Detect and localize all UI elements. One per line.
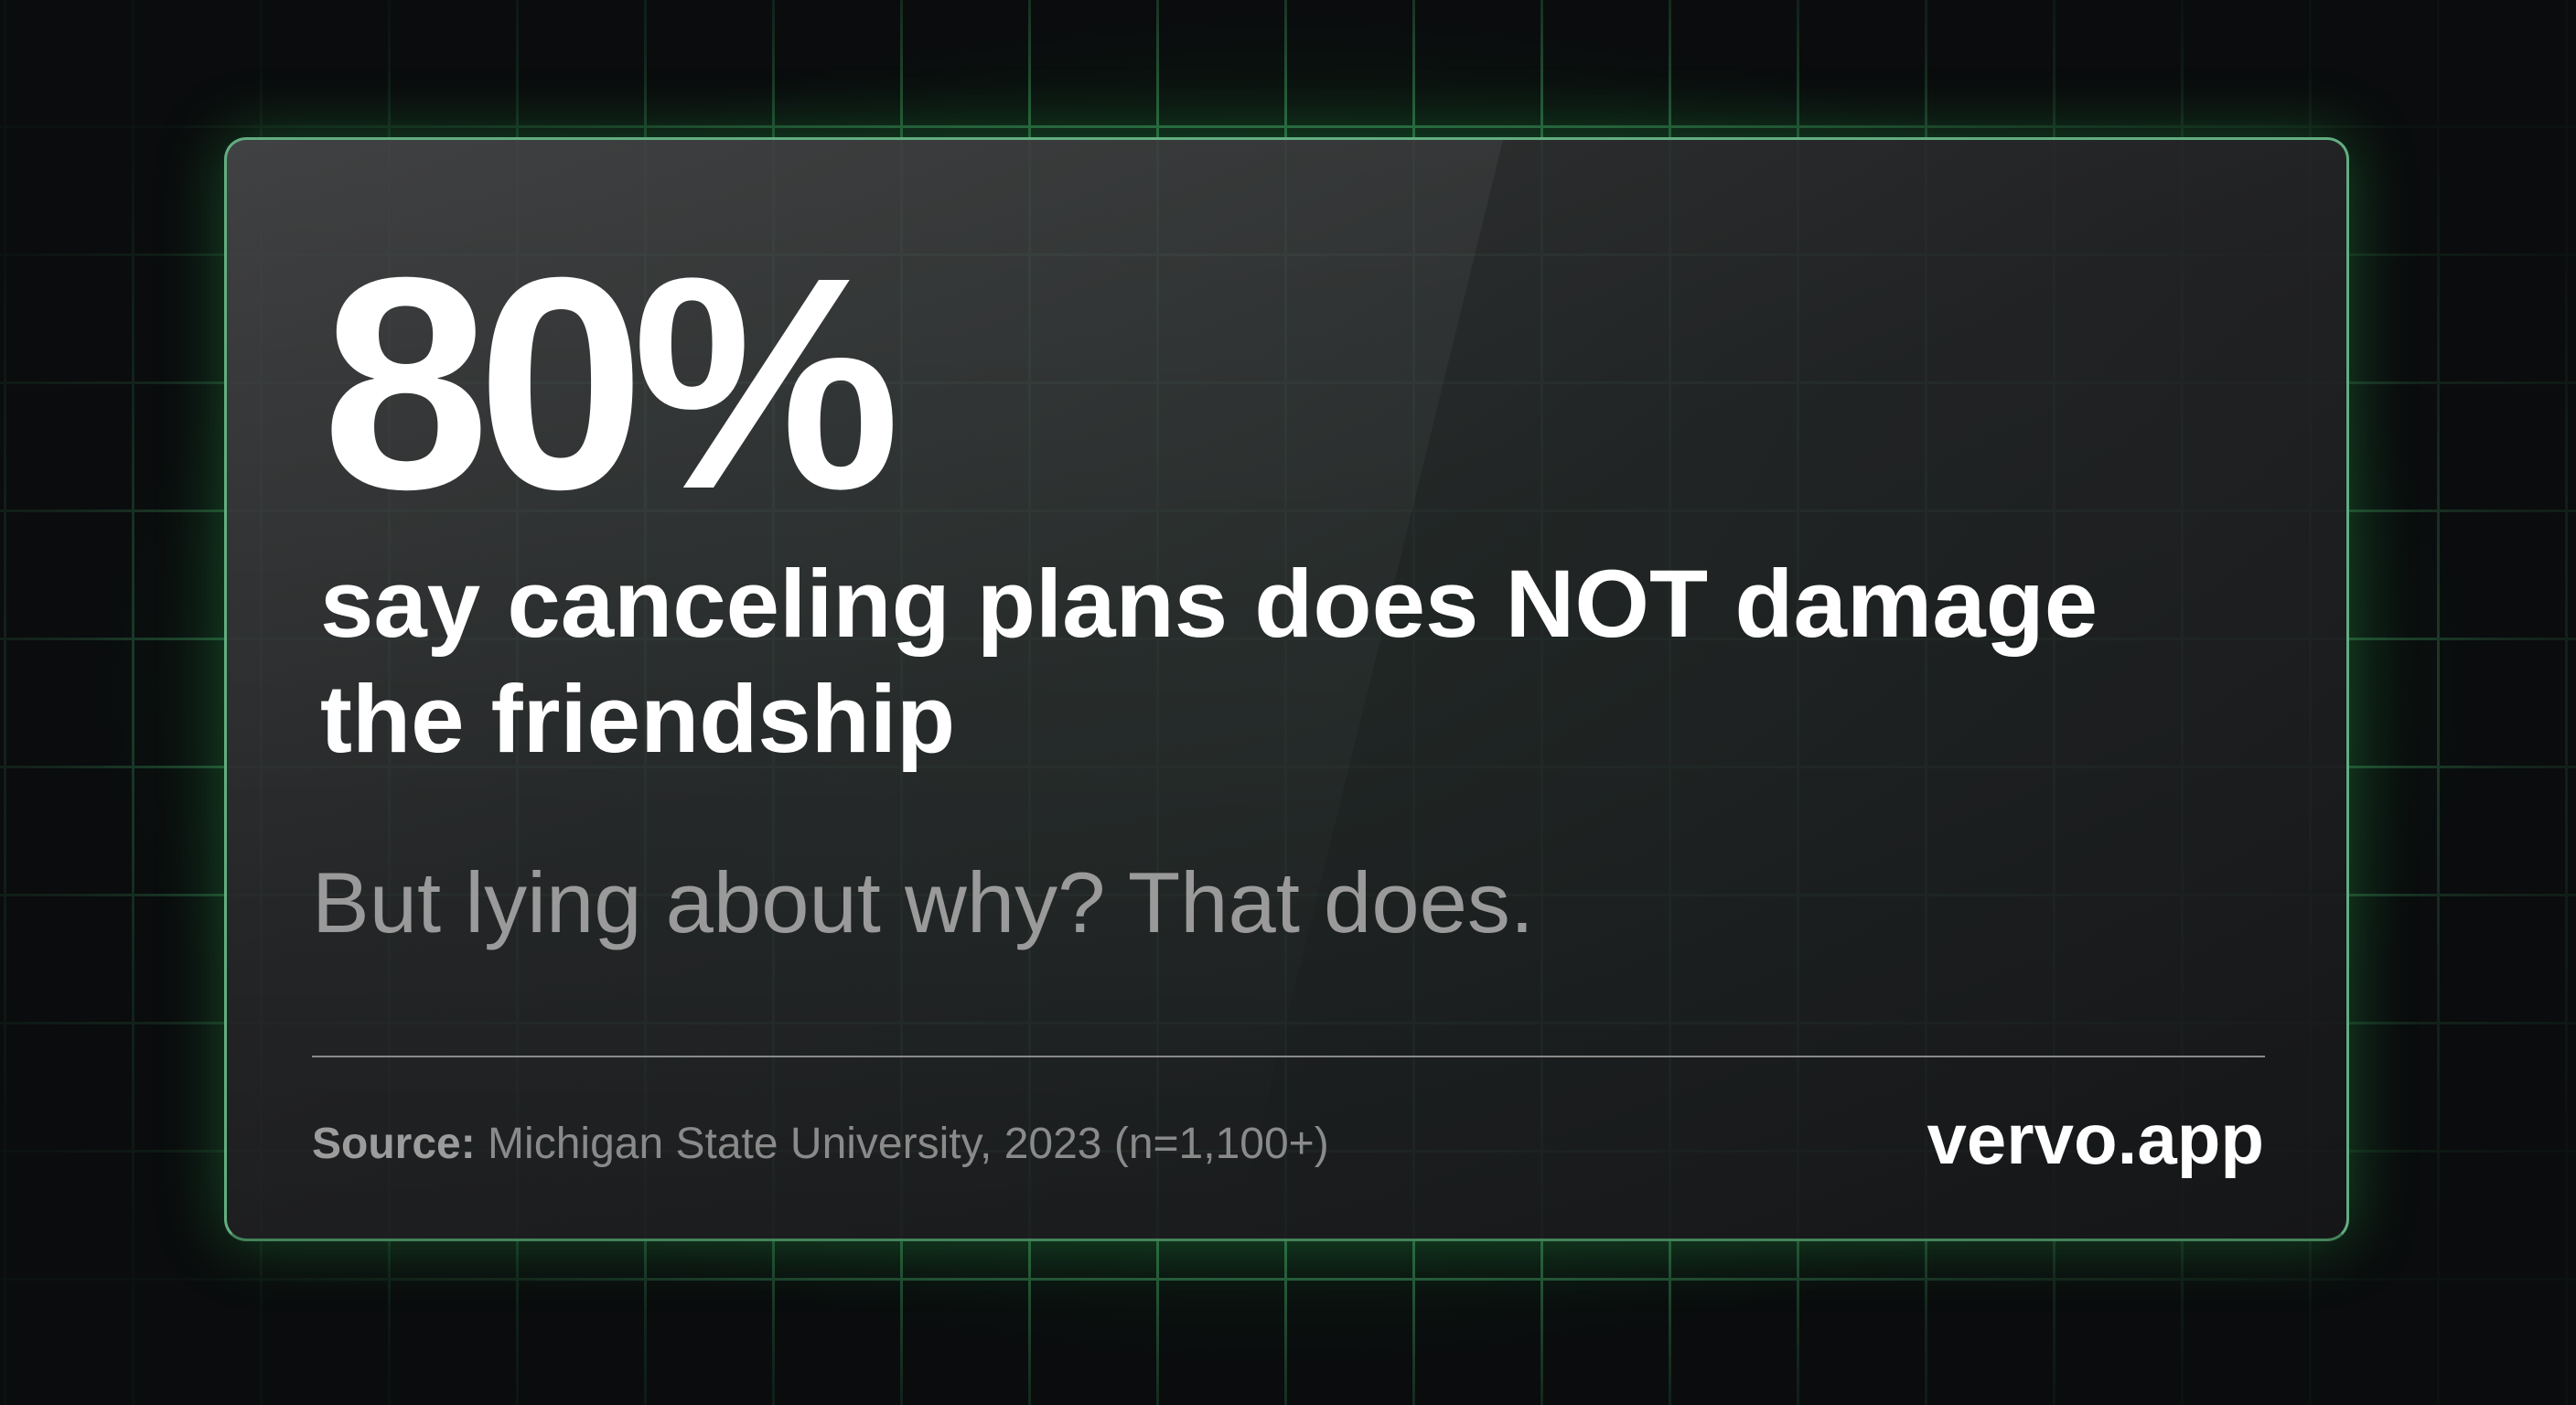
headline statement: say canceling plans does NOT damage <box>320 551 2098 658</box>
headline statement <box>320 551 2098 773</box>
subtext: But lying about why? That does. <box>312 854 1534 950</box>
brand: vervo.app: vervo.app <box>1927 1099 2264 1179</box>
big stat: 80%: 80% <box>322 214 887 552</box>
headline statement: the friendship <box>320 666 955 773</box>
card panel <box>224 137 2349 1241</box>
source citation: Source: Michigan State University, 2023 (n=1,100+) <box>312 1120 1329 1168</box>
divider <box>312 1056 2265 1057</box>
